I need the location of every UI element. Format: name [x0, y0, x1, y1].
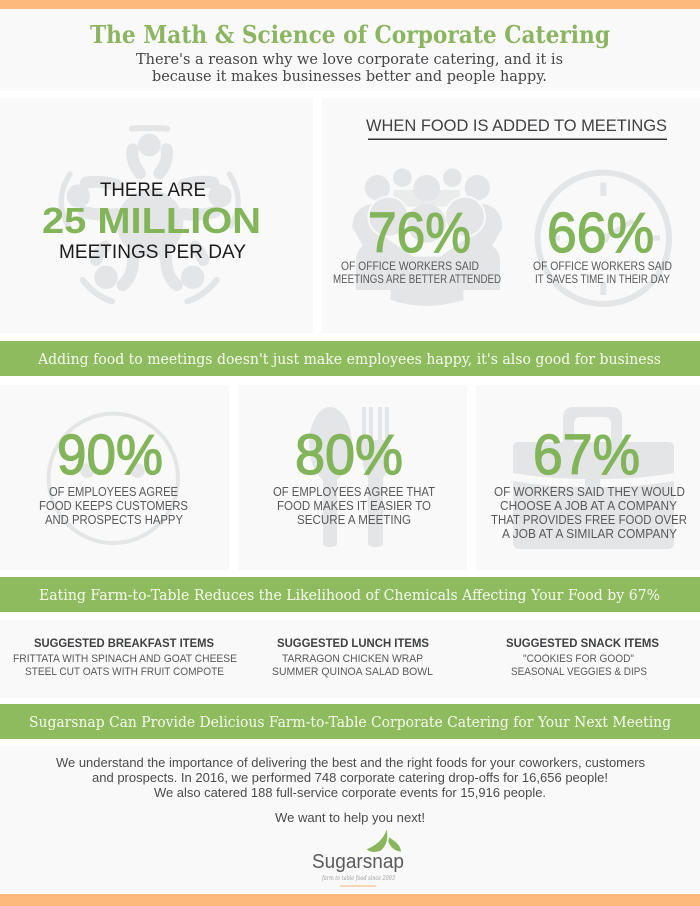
text: 25 million: 25 MILLION [42, 200, 261, 241]
text: 80% description: SECURE A MEETING [297, 513, 411, 527]
text: 67% description: CHOOSE A JOB AT A COMPANY [500, 499, 678, 513]
top orange bar [0, 0, 700, 9]
list: lunch: SUMMER QUINOA SALAD BOWL [272, 666, 433, 678]
icon: briefcase [513, 407, 674, 549]
icon: group of people [352, 168, 502, 306]
text: 67% description: OF WORKERS SAID THEY WOULD [494, 485, 685, 499]
icon: fork [362, 407, 389, 547]
list: breakfast: STEEL CUT OATS WITH FRUIT COMPOTE [25, 666, 224, 678]
icon: spoon [309, 407, 352, 547]
stat: 76%: OF OFFICE WORKERS SAID [341, 261, 479, 273]
subtitle [136, 50, 563, 85]
list: snacks [506, 636, 659, 678]
list: snacks: "COOKIES FOR GOOD" [523, 653, 634, 665]
panel: header [0, 9, 700, 91]
icon: people around a table [61, 128, 238, 301]
text: 80% description [273, 485, 435, 527]
logo: sugarsnap [312, 829, 404, 886]
list: snacks: SUGGESTED SNACK ITEMS [506, 636, 659, 650]
list: breakfast: SUGGESTED BREAKFAST ITEMS [34, 636, 214, 650]
banner: good for business [0, 341, 700, 376]
icon: smiley [49, 414, 178, 543]
text: 67% description [491, 485, 687, 541]
panel: when food is added to meetings [322, 98, 700, 333]
panel: 90% [0, 385, 229, 570]
panel: 80% [238, 385, 467, 570]
text: 80% description: OF EMPLOYEES AGREE THAT [273, 485, 435, 499]
paragraph: and prospects. In 2016, we performed 748 corporate catering drop-offs for 16,656 people! [92, 770, 608, 785]
icon: pea pods [367, 829, 401, 852]
panel: 67%: 67% [533, 423, 640, 487]
list: breakfast: FRITTATA WITH SPINACH AND GOAT CHEESE [13, 653, 237, 665]
banner: sugarsnap: Sugarsnap Can Provide Delicious Farm-to-Table Corporate Catering for Your Next Meeting [29, 714, 671, 731]
stat: 76%: MEETINGS ARE BETTER ATTENDED [333, 274, 501, 286]
stat: 66% [533, 201, 672, 286]
text: 80% description: FOOD MAKES IT EASIER TO [277, 499, 431, 513]
paragraph [56, 755, 645, 825]
panel: 80%: 80% [295, 423, 403, 487]
list: lunch: TARRAGON CHICKEN WRAP [282, 653, 423, 665]
text: 90% description: OF EMPLOYEES AGREE [49, 485, 178, 499]
banner: farm-to-table: Eating Farm-to-Table Reduces the Likelihood of Chemicals Affecting Your Food by 67% [39, 587, 660, 604]
banner: sugarsnap [0, 704, 700, 739]
heading: WHEN FOOD IS ADDED TO MEETINGS [366, 116, 667, 135]
panel: suggested items [0, 620, 700, 698]
text: 90% description [39, 485, 188, 527]
banner: good for business: Adding food to meetings doesn't just make employees happy, it's also good for business [37, 351, 661, 368]
panel: 25 million meetings [0, 98, 313, 333]
stat: 66%: 66% [547, 201, 654, 265]
text: meetings per day: MEETINGS PER DAY [59, 242, 246, 263]
icon: clock [538, 173, 669, 304]
text: there are: THERE ARE [100, 180, 206, 201]
text: 90% description: AND PROSPECTS HAPPY [45, 513, 184, 527]
title: The Math & Science of Corporate Catering [90, 20, 610, 49]
stat: 76% [333, 201, 501, 286]
stat: 66%: IT SAVES TIME IN THEIR DAY [535, 274, 670, 286]
panel: 67% [476, 385, 700, 570]
text: 67% description: THAT PROVIDES FREE FOOD OVER [491, 513, 687, 527]
list: lunch: SUGGESTED LUNCH ITEMS [277, 636, 429, 650]
list: snacks: SEASONAL VEGGIES & DIPS [511, 666, 647, 678]
logo: sugarsnap: farm to table food since 2003 [321, 875, 395, 882]
text: 90% description: FOOD KEEPS CUSTOMERS [39, 499, 188, 513]
panel: closing message [0, 746, 700, 894]
stat: 66%: OF OFFICE WORKERS SAID [533, 261, 672, 273]
paragraph: We want to help you next! [275, 810, 425, 825]
list: breakfast [13, 636, 237, 678]
list: lunch [272, 636, 433, 678]
paragraph: We also catered 188 full-service corporate events for 15,916 people. [154, 785, 546, 800]
bottom orange bar [0, 894, 700, 906]
subtitle: because it makes businesses better and people happy. [152, 67, 547, 85]
panel: 90%: 90% [57, 423, 163, 487]
stat: 76%: 76% [368, 201, 471, 265]
text: 67% description: A JOB AT A SIMILAR COMPANY [502, 527, 678, 541]
logo: sugarsnap: Sugarsnap [312, 851, 404, 873]
paragraph: We understand the importance of delivering the best and the right foods for your coworkers, customers [56, 755, 645, 770]
subtitle: There's a reason why we love corporate catering, and it is [136, 50, 563, 68]
banner: farm-to-table [0, 577, 700, 612]
